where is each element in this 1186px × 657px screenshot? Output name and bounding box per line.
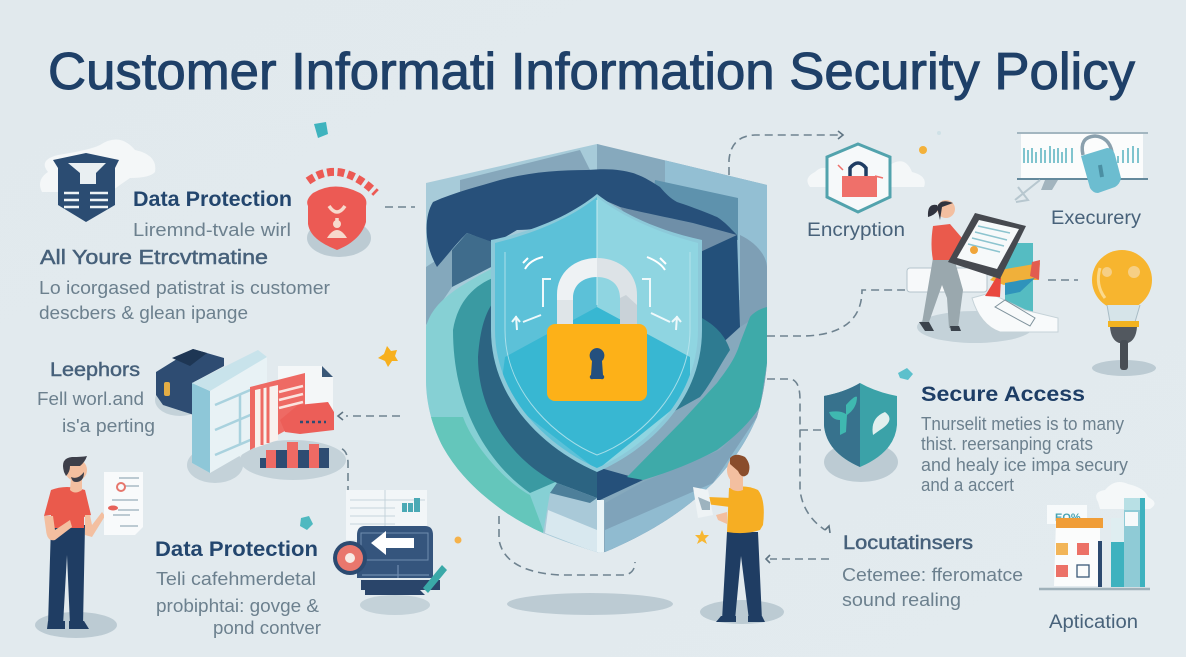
navy band [427,169,737,267]
label: Execurery [1051,208,1142,229]
heading: Data Protection [155,538,318,561]
panel: data protection bottom [155,538,321,638]
central shield [420,140,777,560]
bottom pale facets [543,493,597,553]
text block: Liremnd-tvale wirl [133,220,291,240]
dark ring [478,300,597,498]
panel: leephors [37,360,155,436]
inner shield [490,190,707,480]
padlock [547,258,647,401]
heading: Secure Access [921,383,1085,406]
icon: application building: EO% [1055,512,1081,524]
machine body [357,526,433,578]
illustration: man with report [35,456,143,638]
icon: teal shield [824,383,898,482]
label: Aptication [1049,612,1138,633]
heading: All Youre Etrcvtmatine [40,247,268,269]
label: Encryption [807,220,905,241]
heading: Data Protection [133,188,292,211]
icon: monitor with padlock [1015,133,1148,202]
text block: thist. reersanping crats [921,434,1093,454]
tablet [948,213,1026,279]
report [104,472,143,535]
text block: Lo icorgased patistrat is customer [39,278,330,298]
heading: Locutatinsers [843,533,973,554]
ground shadow under shield [507,593,673,615]
left lower grey [426,250,452,325]
panel: encryption [807,144,925,241]
text block: Cetemee: fferomatce [842,565,1023,585]
panel: your enterprise text [39,247,330,323]
legs [922,258,963,328]
teal ring [453,278,556,493]
right navy block [702,235,740,340]
decorative stars [300,122,941,544]
dashed connectors [338,131,1078,575]
gear [333,541,367,575]
text block: Teli cafehmerdetal [156,569,316,589]
torso [932,224,962,260]
panel: execurery [1015,133,1148,229]
panel: your enterprise text: descbers & glean ipange [39,303,248,323]
icon: encryption hex lock with cloud [807,144,925,212]
panel: data protection bottom: probiphtai: govge & [156,596,319,616]
top facets [460,150,590,192]
illustration: arrow machine [333,490,447,615]
heading: Leephors [50,360,140,381]
right teal swoosh [627,307,767,480]
white arrow [371,531,414,555]
text block: Fell worl.and [37,389,144,409]
panel: data protection bottom: pond contver [213,618,321,638]
white slab and machine [907,268,987,292]
icon: application building [1039,482,1155,589]
panel: leephors: is'a perting [62,416,155,436]
panel: locutatinsers [842,533,1023,610]
text block: and a accert [921,475,1014,495]
illustration: woman with tablet [907,200,1058,343]
icon: cloud and shield document [40,140,155,222]
navy tip [597,467,643,500]
pencil [423,565,447,593]
document [346,490,427,540]
icon: red shield [307,172,376,257]
right dark swoosh [675,318,730,411]
shield outer body [420,140,777,560]
illustration: server and documents [155,349,346,483]
panel: secure access [824,383,1128,495]
text block: and healy ice impa secury [921,455,1128,475]
torso [44,487,91,528]
right facets [605,363,767,552]
text block [921,414,1128,495]
title: Customer Informati Information Security Policy [48,43,1135,101]
legs [48,525,85,625]
text block: Tnurselit meties is to many [921,414,1124,434]
panel: application [1039,482,1155,633]
panel: locutatinsers: sound realing [842,590,961,610]
left pale teal band [426,269,557,530]
illustration: man in yellow with paper [693,455,784,624]
panel: data protection top left [40,140,292,240]
icon: lightbulb [1092,250,1156,376]
